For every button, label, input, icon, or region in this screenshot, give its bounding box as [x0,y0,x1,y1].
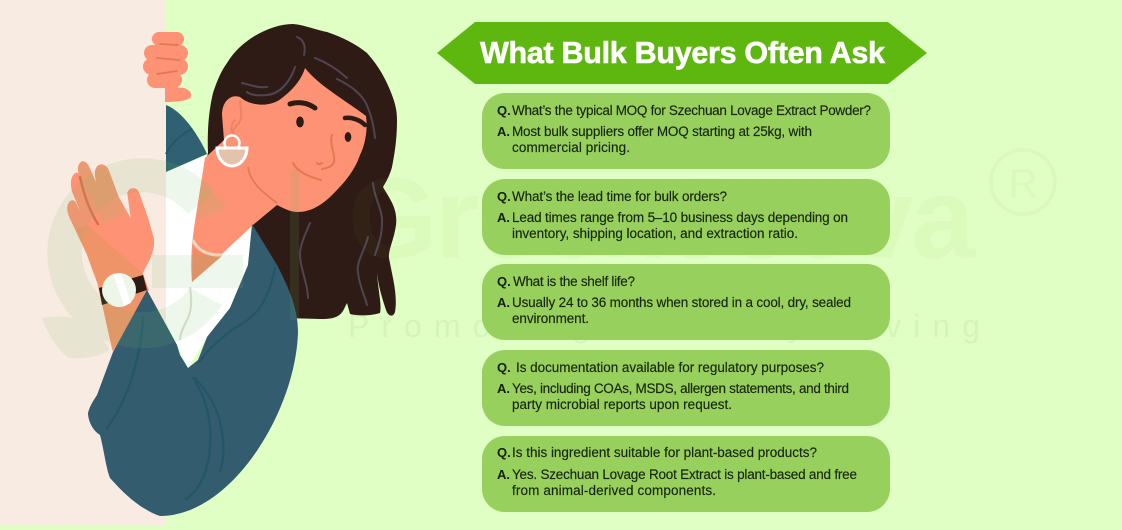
eyebrows [290,103,315,108]
FAQ card 3: Usually 24 to 36 months when stored in a cool, dry, sealed [512,295,851,310]
question 3: Q. [497,274,511,289]
hair streaks [242,37,382,305]
FAQ card 4 [482,350,890,426]
FAQ card 3: What is the shelf life? [513,274,635,289]
question 4: Q. [497,360,511,375]
neck shading [197,183,227,220]
FAQ card 1: What’s the typical MOQ for Szechuan Lovage Extract Powder? [512,103,871,118]
eyes [296,116,304,128]
shirt [166,155,253,368]
FAQ card 3 [482,264,890,340]
neck and face [191,68,367,282]
question 2: Q. [497,189,511,204]
FAQ card 2: Lead times range from 5–10 business days depending on [512,210,848,225]
hand shading [79,162,124,224]
FAQ card 4: Is documentation available for regulatory purposes? [516,360,824,375]
watermark: tagline: Promoting Healthy Living [348,308,980,344]
wall panel [0,0,165,526]
FAQ card 5: Is this ingredient suitable for plant-based products? [512,445,817,460]
jaw line [248,167,277,203]
FAQ card 2: What’s the lead time for bulk orders? [512,189,727,204]
watermark: registered mark: R [1009,162,1037,206]
answer 3: A. [497,295,510,310]
watermark: brand name: GreenJeeva [348,155,976,283]
FAQ card 5: Yes. Szechuan Lovage Root Extract is plant-based and free [512,467,857,482]
jacket [88,224,298,516]
FAQ card 1: Most bulk suppliers offer MOQ starting at 25kg, with [512,124,812,139]
FAQ card 3: environment. [512,311,589,326]
answer 5: A. [497,467,510,482]
title: What Bulk Buyers Often Ask [480,36,885,70]
FAQ card 4: Yes, including COAs, MSDS, allergen statements, and third [512,381,849,396]
FAQ card 1 [482,93,890,169]
answer 2: A. [497,210,510,225]
answer 4: A. [497,381,510,396]
hair [205,24,397,319]
watermark: registered mark [991,150,1055,214]
FAQ card 1: commercial pricing. [512,140,630,155]
back sleeve [166,105,207,172]
nose [317,135,334,169]
earring [217,136,247,166]
answer 1: A. [497,124,510,139]
FAQ card 5 [482,436,890,512]
title banner [437,22,927,84]
question 1: Q. [497,103,511,118]
wristwatch [99,273,147,307]
raised arm and waving hand [68,162,153,350]
smile [293,163,321,180]
watermark: G emblem [42,158,299,358]
FAQ card 5: from animal-derived components. [512,483,716,498]
FAQ card 2: inventory, shipping location, and extraction ratio. [512,226,798,241]
necklace [193,240,222,255]
FAQ card 4: party microbial reports upon request. [512,397,732,412]
question 5: Q. [497,445,511,460]
watermark logo and wordmark [42,150,1055,358]
ear detail [232,100,241,138]
jacket folds [107,268,275,499]
illustration: woman peeking from behind wall [68,24,397,516]
FAQ card 2 [482,179,890,255]
hand gripping wall [143,32,191,102]
